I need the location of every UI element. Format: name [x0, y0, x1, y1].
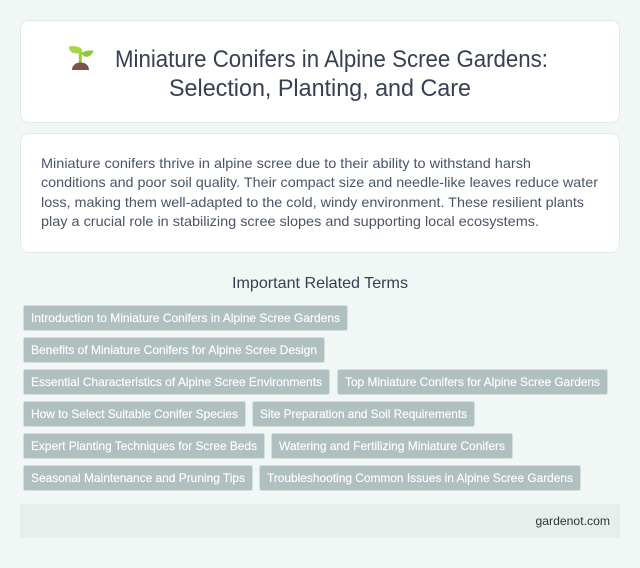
icon: seedling [69, 46, 94, 70]
title: Selection, Planting, and Care [169, 75, 471, 102]
tag: Troubleshooting Common Issues in Alpine Scree Gardens [267, 471, 573, 485]
heading: related terms: Important Related Terms [232, 275, 408, 292]
footer [20, 504, 620, 538]
panel: description [20, 134, 620, 252]
title: Miniature Conifers in Alpine Scree Gardens: [115, 46, 548, 73]
tag: Seasonal Maintenance and Pruning Tips [31, 471, 245, 485]
tag: Top Miniature Conifers for Alpine Scree Gardens [345, 375, 600, 389]
description text: conditions and poor soil quality. Their compact size and needle-like leaves reduce water [41, 174, 598, 190]
description text: Miniature conifers thrive in alpine scree due to their ability to withstand harsh [41, 155, 531, 171]
description text: play a crucial role in stabilizing scree slopes and supporting local ecosystems. [41, 213, 539, 229]
tag [252, 402, 474, 426]
tag: Essential Characteristics of Alpine Scree Environments [31, 375, 322, 389]
tag [24, 434, 264, 458]
tag: Site Preparation and Soil Requirements [260, 407, 467, 421]
tag [24, 402, 246, 426]
tag list [24, 306, 608, 490]
tag [24, 370, 330, 394]
tag: Benefits of Miniature Conifers for Alpine Scree Design [31, 343, 317, 357]
tag: How to Select Suitable Conifer Species [31, 407, 238, 421]
panel: title header [20, 20, 620, 122]
tag [260, 466, 580, 490]
tag [24, 338, 324, 362]
description text [41, 155, 598, 229]
tag [24, 306, 348, 330]
tag [338, 370, 608, 394]
tag: Introduction to Miniature Conifers in Alpine Scree Gardens [31, 311, 340, 325]
tag [24, 466, 252, 490]
tag: Watering and Fertilizing Miniature Conifers [279, 439, 505, 453]
tag: Expert Planting Techniques for Scree Beds [31, 439, 257, 453]
tag [272, 434, 512, 458]
footer source text: gardenot.com [536, 514, 610, 528]
title [115, 46, 548, 102]
description text: loss, making them well-adapted to the cold, windy environment. These resilient plants [41, 194, 584, 210]
